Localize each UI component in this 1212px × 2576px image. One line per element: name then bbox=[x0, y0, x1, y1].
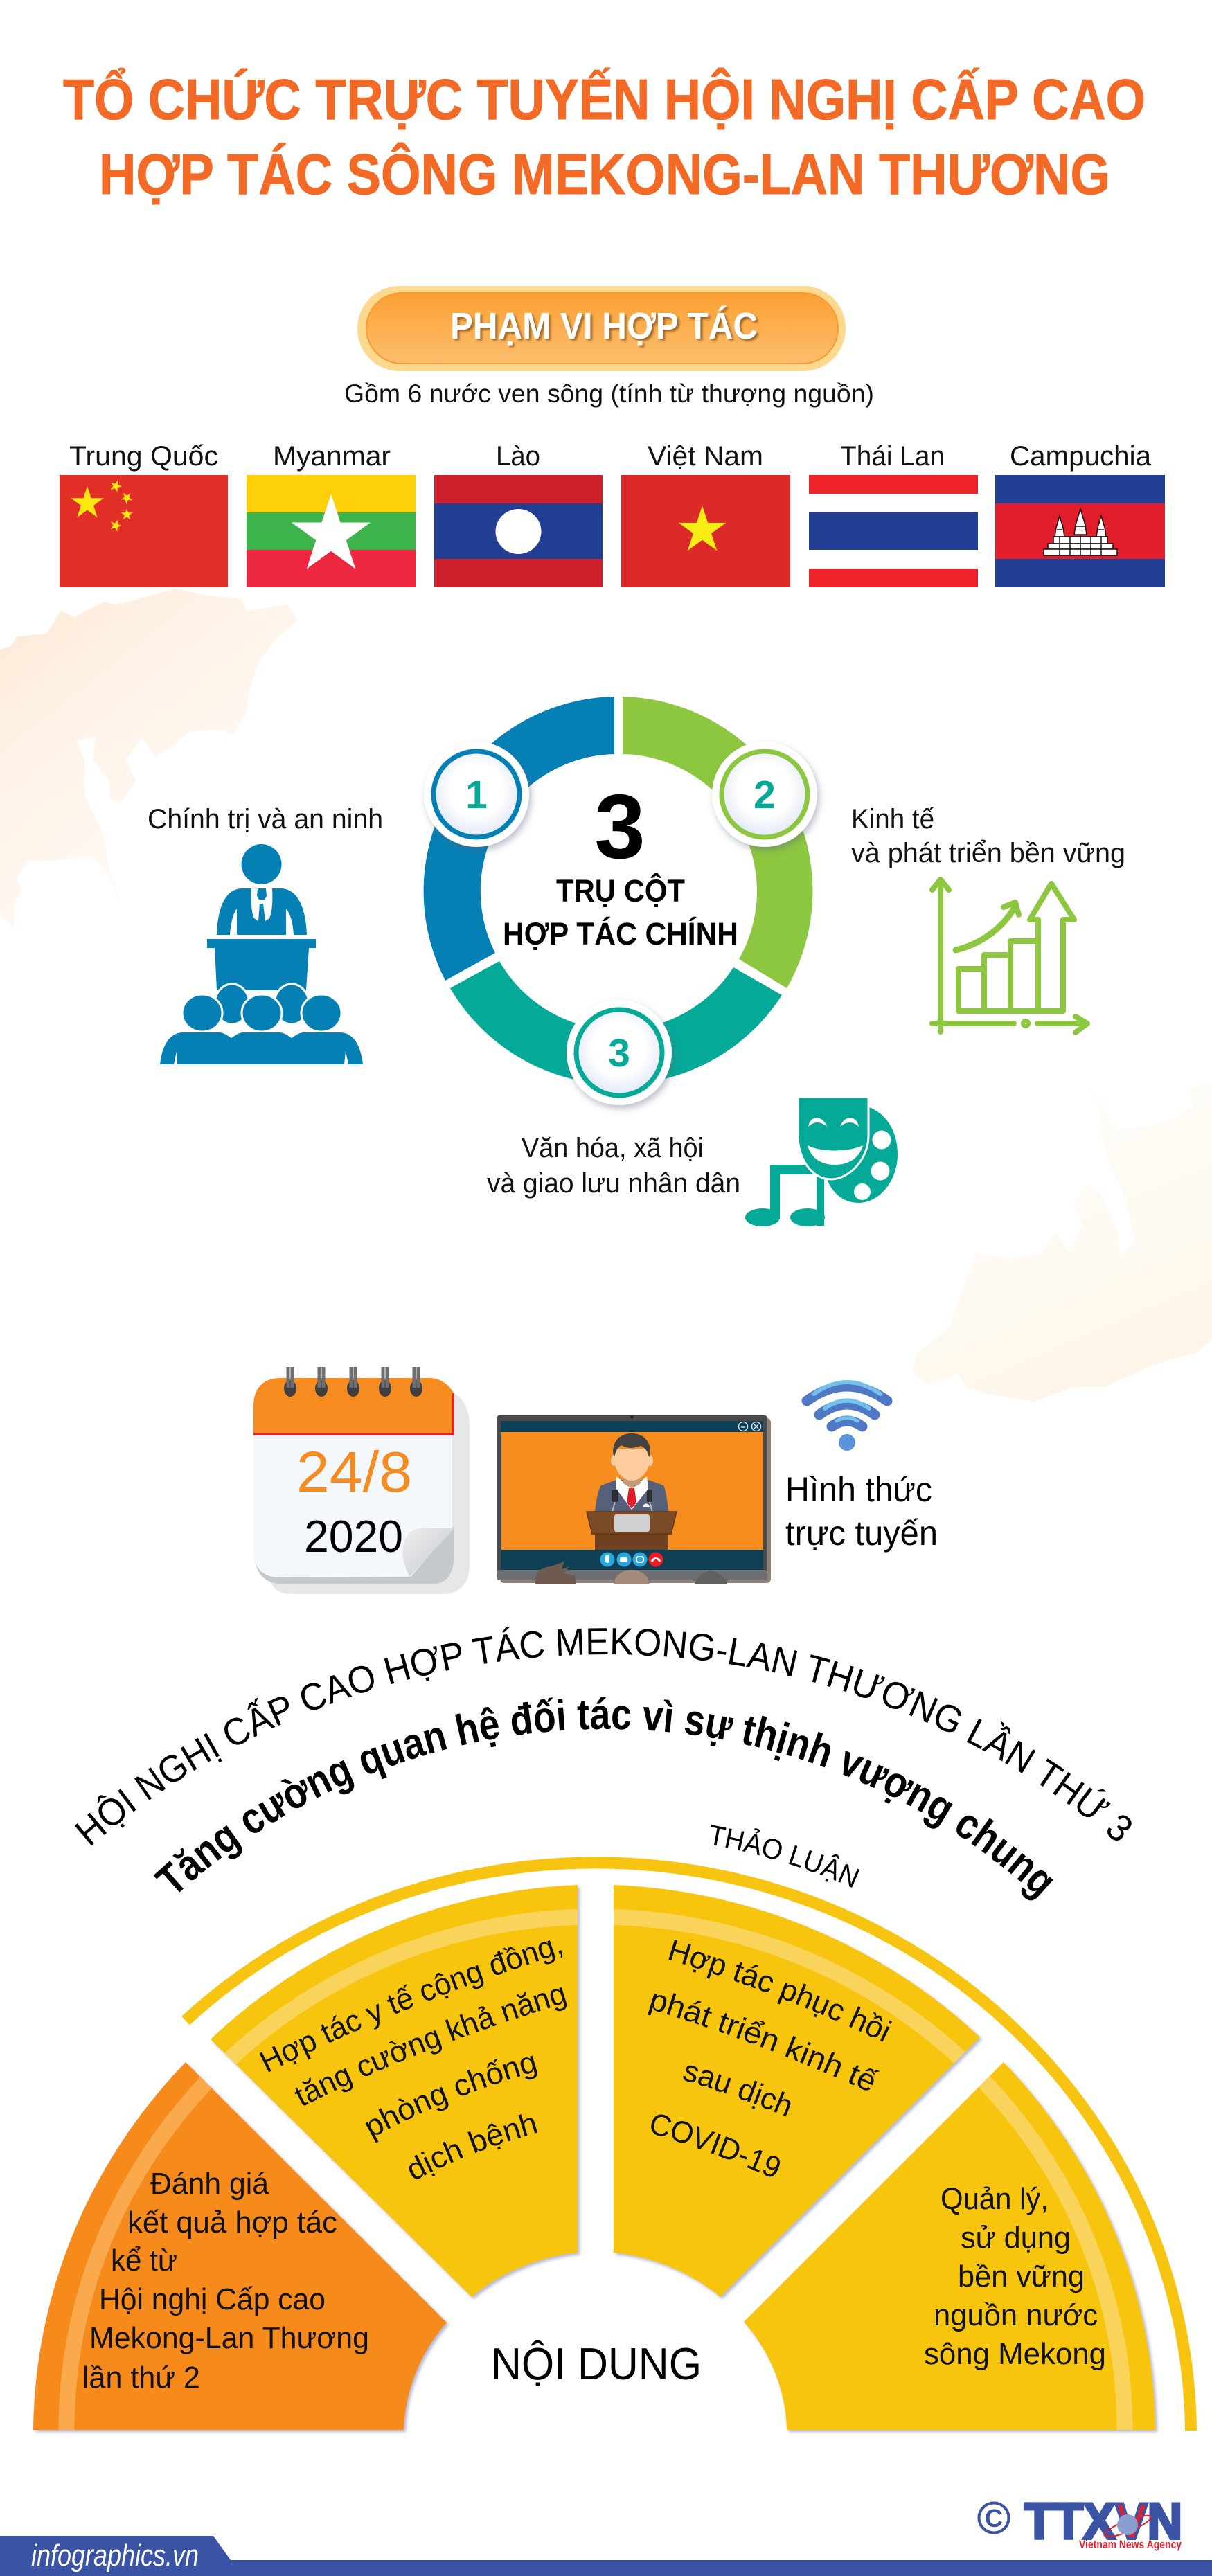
segment 3: teal bbox=[450, 961, 782, 1084]
donut chart: 3 pillars bbox=[424, 697, 817, 1105]
flag: Vietnam: Việt Nam bbox=[648, 441, 763, 472]
panel text: Hội nghị Cấp cao bbox=[99, 2282, 326, 2316]
title: HỢP TÁC SÔNG MEKONG-LAN THƯƠNG bbox=[99, 142, 1110, 206]
watercolor blob: left bbox=[0, 589, 297, 929]
label: Nội dung: NỘI DUNG bbox=[491, 2338, 702, 2389]
icon: growth chart bbox=[932, 879, 1087, 1032]
icon: calendar 24/8 2020 bbox=[253, 1367, 470, 1594]
panel text: sử dụng bbox=[961, 2221, 1071, 2255]
call buttons bbox=[600, 1553, 663, 1566]
flag: Thailand: Thái Lan bbox=[840, 441, 945, 472]
label: Chính trị và an ninh: Chính trị và an ninh bbox=[148, 804, 383, 834]
curved label: Thảo luận: THẢO LUẬN bbox=[711, 1825, 860, 1888]
calendar rings bbox=[284, 1367, 422, 1397]
logo: TTXVN bbox=[979, 2494, 1182, 2551]
globe bbox=[1103, 2512, 1152, 2541]
center text: TRỤ CỘT bbox=[556, 873, 685, 909]
panel text: Đánh giá bbox=[150, 2167, 269, 2201]
panel text bbox=[648, 1940, 892, 2177]
panel text: nguồn nước bbox=[934, 2298, 1098, 2332]
panel text: COVID-19 bbox=[651, 2115, 780, 2177]
icon: wifi bbox=[807, 1382, 887, 1451]
footer bar bbox=[0, 2536, 1212, 2576]
footer site name: infographics.vn bbox=[31, 2539, 199, 2573]
watercolor blob: right bbox=[913, 1080, 1212, 1402]
flag: Cambodia: Campuchia bbox=[1010, 441, 1152, 472]
curved heading: summit name: HỘI NGHỊ CẤP CAO HỢP TÁC MEKONG-LAN THƯƠNG LẦN THỨ 3 bbox=[75, 1627, 1132, 1846]
copyright mark bbox=[979, 2503, 1008, 2533]
badge 2: 2 bbox=[754, 773, 776, 817]
curved heading: theme: Tăng cường quan hệ đối tác vì sự thịnh vượng chung bbox=[154, 1697, 1053, 1900]
button: Phạm vi hợp tác bbox=[357, 286, 846, 371]
date: 24/8 bbox=[296, 1440, 412, 1504]
badge 3 bbox=[567, 1000, 672, 1105]
label: Hình thức trực tuyến bbox=[785, 1470, 938, 1553]
icon: video conference screen bbox=[497, 1415, 771, 1584]
label: Văn hóa, xã hội và giao lưu nhân dân: Văn hóa, xã hội bbox=[522, 1133, 704, 1163]
badge 2 bbox=[712, 742, 817, 847]
panel text: sông Mekong bbox=[924, 2337, 1106, 2371]
panel: economic recovery bbox=[614, 1885, 983, 2300]
presenter bbox=[595, 1433, 668, 1512]
panel text: kể từ bbox=[111, 2244, 177, 2278]
panel text: Mekong-Lan Thương bbox=[89, 2321, 369, 2355]
center text bbox=[503, 776, 738, 951]
panel text: phát triển kinh tế bbox=[648, 1993, 880, 2091]
flag: Myanmar: Myanmar bbox=[273, 441, 391, 472]
audience heads bbox=[535, 1562, 727, 1584]
label: Hình thức trực tuyến: Hình thức bbox=[785, 1470, 932, 1509]
icon: Angkor temple bbox=[1044, 509, 1117, 555]
calendar page bbox=[253, 1435, 452, 1577]
year: 2020 bbox=[304, 1511, 403, 1562]
label: Hình thức trực tuyến: trực tuyến bbox=[785, 1514, 938, 1553]
flag: Thailand bbox=[809, 441, 978, 587]
window controls bbox=[738, 1422, 760, 1431]
panel text bbox=[924, 2182, 1106, 2371]
calendar shadow bbox=[267, 1392, 470, 1594]
panel: evaluation (orange) bbox=[33, 2062, 450, 2433]
panel text: sau dịch bbox=[683, 2065, 791, 2116]
badge 3: 3 bbox=[608, 1031, 630, 1075]
calendar header bbox=[253, 1378, 454, 1433]
flags row bbox=[60, 441, 1165, 587]
center text: 3 bbox=[594, 776, 645, 877]
outer arc: discussion band bbox=[186, 1863, 1191, 2431]
segment 1: blue bbox=[424, 697, 614, 981]
panel text: dịch bệnh bbox=[409, 2114, 537, 2179]
flag: China: Trung Quốc bbox=[69, 441, 218, 472]
panel: Mekong water bbox=[744, 2062, 1159, 2433]
label: Kinh tế và phát triển bền vững: Kinh tế bbox=[851, 804, 934, 834]
wordmark: TTXVN bbox=[1024, 2494, 1182, 2550]
label: Kinh tế và phát triển bền vững bbox=[851, 804, 1125, 868]
flag: Laos bbox=[434, 441, 603, 587]
panel text: Hợp tác y tế cộng đồng, bbox=[259, 1940, 562, 2072]
icon: theatre mask, palette and music notes bbox=[745, 1097, 898, 1226]
copyright mark: C bbox=[985, 2504, 1003, 2532]
panel text: kết quả hợp tác bbox=[127, 2206, 337, 2239]
panel text: lần thứ 2 bbox=[82, 2361, 200, 2395]
agency name: Vietnam News Agency bbox=[1079, 2538, 1182, 2551]
panel text bbox=[82, 2167, 369, 2395]
badge 1: 1 bbox=[465, 773, 488, 817]
label: Văn hóa, xã hội và giao lưu nhân dân: và giao lưu nhân dân bbox=[487, 1168, 740, 1199]
panel text: phòng chống bbox=[366, 2055, 537, 2143]
lectern bbox=[587, 1512, 677, 1550]
center text: HỢP TÁC CHÍNH bbox=[503, 916, 738, 951]
flag: China bbox=[60, 441, 228, 587]
segment 2: green bbox=[623, 697, 812, 988]
panel: health cooperation bbox=[211, 1885, 582, 2300]
flag: Vietnam bbox=[621, 441, 790, 587]
panel text: Quản lý, bbox=[941, 2182, 1049, 2216]
subtitle: Gồm 6 nước ven sông (tính từ thượng nguồn) bbox=[344, 379, 874, 408]
panel text bbox=[259, 1940, 567, 2179]
label: Văn hóa, xã hội và giao lưu nhân dân bbox=[487, 1133, 740, 1199]
panel text: bền vững bbox=[958, 2260, 1085, 2293]
label: Kinh tế và phát triển bền vững: và phát triển bền vững bbox=[851, 838, 1125, 868]
flag: Cambodia bbox=[995, 441, 1165, 587]
title bbox=[63, 66, 1146, 206]
panel text: tăng cường khả năng bbox=[294, 1987, 567, 2105]
button: Phạm vi hợp tác: PHẠM VI HỢP TÁC bbox=[450, 305, 758, 347]
badge 1 bbox=[424, 742, 529, 847]
icon: speaker at podium with audience bbox=[160, 844, 363, 1064]
panel text: Hợp tác phục hồi bbox=[668, 1940, 892, 2042]
flag: Myanmar bbox=[247, 441, 416, 587]
semicircle panels bbox=[33, 1885, 1159, 2433]
flag: Laos: Lào bbox=[496, 441, 540, 472]
